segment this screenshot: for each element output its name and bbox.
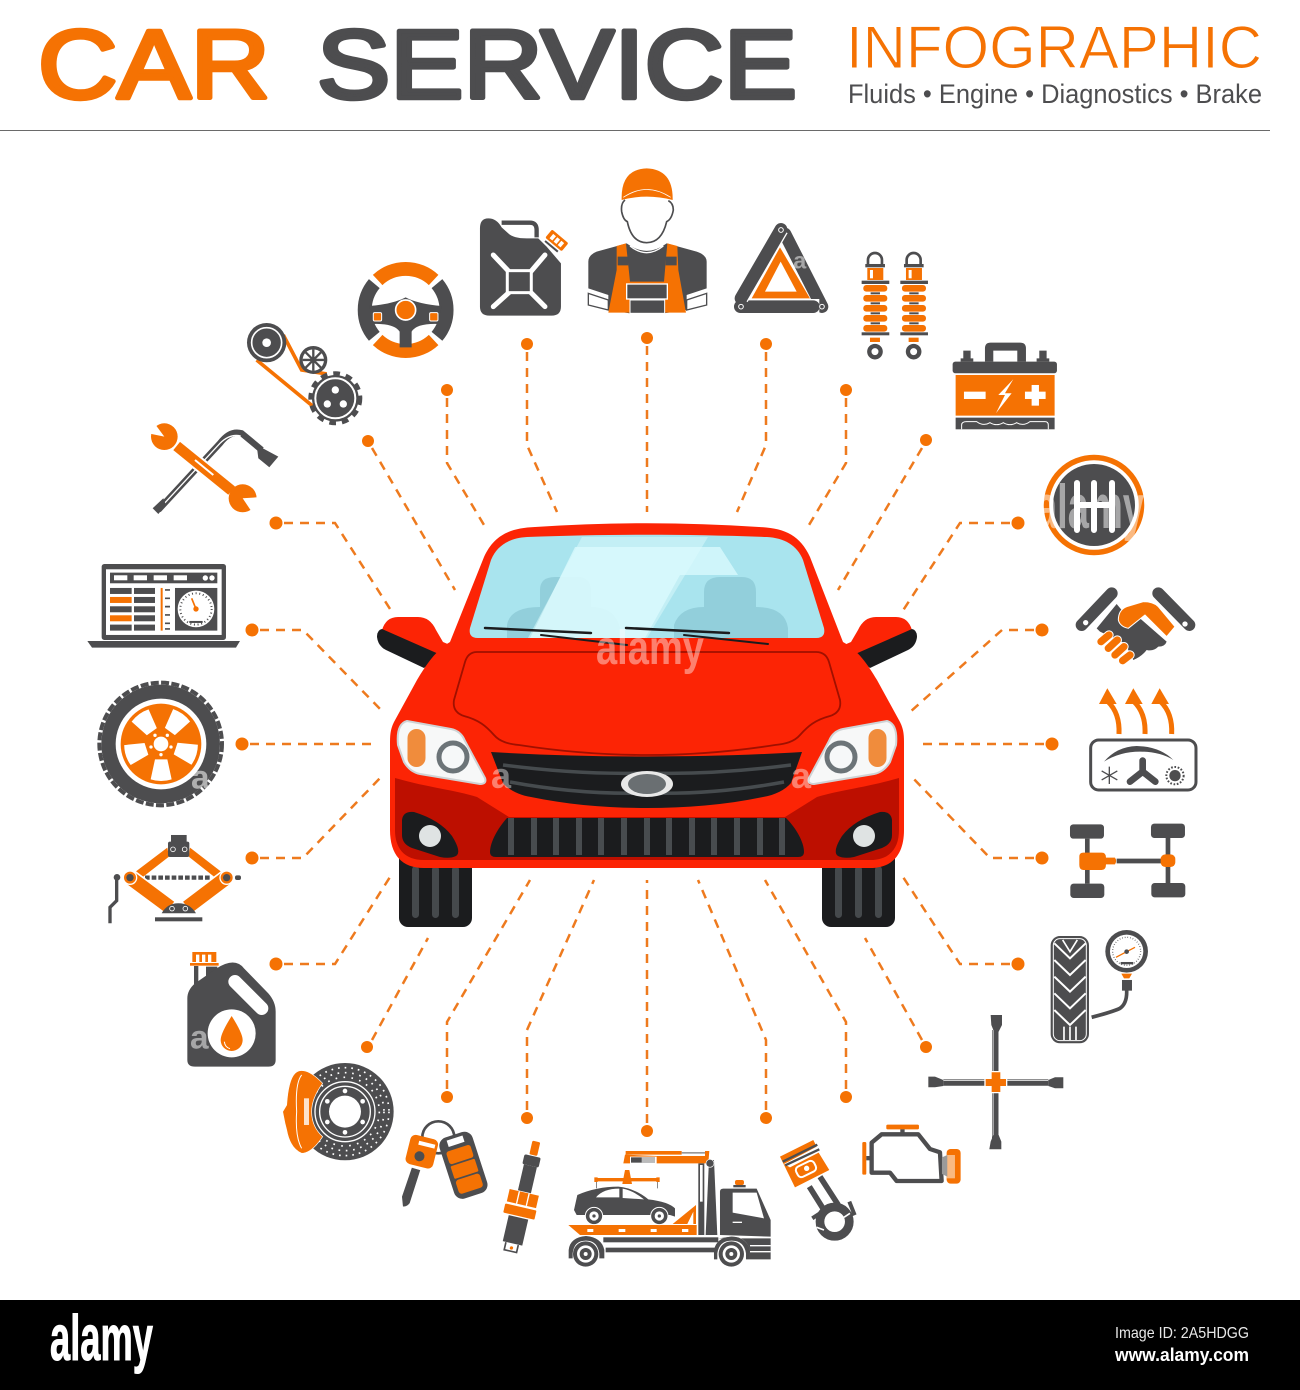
title: car service: CAR (38, 10, 270, 119)
icon: warning triangle: a (793, 247, 807, 273)
icon: chassis (1070, 824, 1185, 898)
connector: brake (361, 938, 428, 1053)
tagline: Fluids • Engine • Diagnostics • Brake (848, 79, 1262, 109)
connector: climate (918, 738, 1058, 750)
icon: mechanic (588, 168, 707, 313)
alamy logo: alamy (50, 1302, 153, 1374)
connector: cross wrench (865, 938, 932, 1053)
icon: steering wheel (365, 269, 447, 351)
connector: wheel (236, 738, 375, 750)
subtitle: infographic: INFOGRAPHIC (846, 14, 1262, 81)
footer bar (0, 1300, 1300, 1390)
icon: tow truck (568, 1151, 771, 1267)
icon: battery (953, 343, 1057, 429)
left mirror (377, 617, 450, 668)
icon: laptop diagnostics (87, 564, 240, 648)
right tire (822, 850, 895, 927)
connector: belt (362, 435, 455, 590)
connector: oil (270, 877, 390, 970)
connector: chassis (910, 775, 1048, 864)
connector: battery (838, 434, 932, 590)
watermark across gear shift: alamy (1036, 473, 1144, 542)
connector: mechanic (641, 332, 653, 512)
seat silhouettes (507, 577, 788, 638)
title: car service (38, 10, 797, 119)
icon: spark plug (495, 1138, 552, 1255)
watermark on car (491, 622, 812, 796)
connector: gear shift (902, 516, 1024, 612)
connector: tow truck (641, 880, 653, 1137)
connector: wrenches (270, 516, 392, 612)
icon: wheel: a (191, 759, 210, 796)
car (377, 523, 917, 927)
icon: oil canister: a (190, 1019, 209, 1056)
title: car service: SERVICE (317, 10, 797, 119)
watermark on car: a (791, 755, 812, 796)
connector: laptop (246, 624, 383, 712)
wipers (485, 628, 768, 645)
car body (390, 523, 904, 868)
icon: timing belt (247, 323, 360, 423)
connector: steering wheel (441, 384, 487, 530)
icon: wrench and lug key (140, 415, 278, 517)
connector: shocks (806, 384, 852, 530)
icon: oil canister (187, 952, 276, 1067)
icon: car keys (402, 1121, 490, 1207)
connector: handshake (910, 624, 1048, 712)
connector: piston (698, 880, 772, 1124)
icon: jerrycan (480, 218, 568, 316)
icon: cross wrench (928, 1015, 1063, 1149)
connector: triangle (737, 338, 772, 512)
right headlight (809, 721, 896, 784)
website: www.alamy.com (1114, 1345, 1249, 1365)
lower bumper shade (395, 778, 899, 860)
left fog lamp (402, 812, 458, 858)
left headlight (398, 721, 485, 784)
icon: shock absorbers (862, 253, 928, 357)
icon: engine (862, 1125, 961, 1184)
lower grille (490, 818, 804, 857)
icon: car jack (110, 835, 241, 923)
left shock (862, 253, 889, 357)
windshield glare (528, 537, 708, 638)
icon: wheel (99, 683, 222, 805)
left tire (399, 850, 472, 927)
connector: jack (246, 775, 383, 864)
icon: handshake (1082, 593, 1189, 661)
hood line (454, 652, 840, 755)
right mirror (844, 617, 917, 668)
right fog lamp (836, 812, 892, 858)
connector: jerrycan (521, 338, 557, 512)
icon: tire pressure gauge (1051, 930, 1148, 1043)
upper grille (491, 752, 802, 808)
icon: gear shift (1046, 458, 1142, 552)
image id: Image ID: 2A5HDGG (1115, 1325, 1249, 1342)
connector: engine (765, 880, 852, 1103)
watermark on car: a (491, 755, 512, 796)
icon: piston (780, 1140, 854, 1236)
right shock (900, 253, 928, 357)
icon: climate control (1091, 688, 1196, 790)
icon: warning triangle (739, 228, 824, 309)
connector group (236, 332, 1058, 1137)
connector: keys (441, 880, 530, 1103)
car badge (621, 771, 673, 797)
connector: spark plug (521, 880, 594, 1124)
windshield (470, 535, 824, 645)
watermark on car: alamy (596, 622, 704, 675)
icon: brake disc (283, 1063, 394, 1160)
connector: tire pressure (903, 877, 1024, 970)
